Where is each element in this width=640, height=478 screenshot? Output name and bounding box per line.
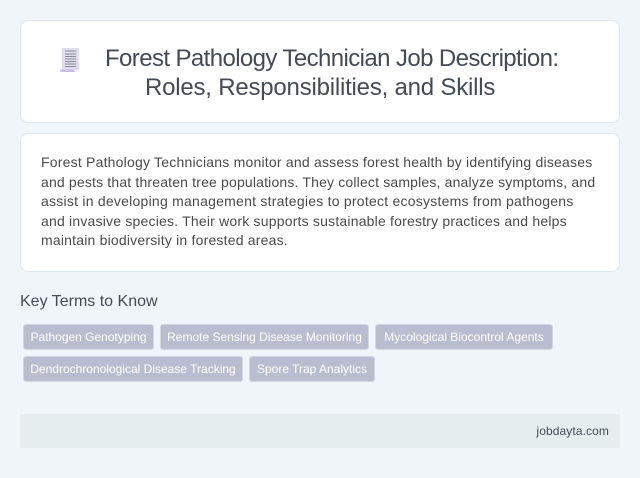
- description text: [41, 154, 595, 248]
- tag: [23, 324, 154, 350]
- description text: and pests that threaten tree populations. They collect samples, analyze symptoms, and: [41, 174, 595, 190]
- tag list: [23, 324, 553, 382]
- tag: [160, 324, 369, 350]
- tag: Mycological Biocontrol Agents: [384, 330, 544, 344]
- description text: maintain biodiversity in forested areas.: [41, 232, 288, 248]
- title line 1: Forest Pathology Technician Job Description:: [105, 45, 558, 72]
- description text: and invasive species. Their work supports sustainable forestry practices and helps: [41, 213, 567, 229]
- title line 2: Roles, Responsibilities, and Skills: [145, 74, 495, 101]
- tag: Pathogen Genotyping: [30, 330, 147, 344]
- description text: assist in developing management strategies to protect ecosystems from pathogens: [41, 193, 574, 209]
- tag: Dendrochronological Disease Tracking: [30, 362, 236, 376]
- tag: Spore Trap Analytics: [257, 362, 367, 376]
- footer source: jobdayta.com: [536, 424, 609, 438]
- description panel: [20, 133, 620, 272]
- footer bar: [20, 414, 620, 448]
- heading: key terms: Key Terms to Know: [20, 293, 158, 310]
- description text: Forest Pathology Technicians monitor and assess forest health by identifying diseases: [41, 154, 592, 170]
- header panel: [20, 20, 620, 123]
- icon: document scroll: [60, 48, 79, 72]
- tag: [23, 356, 243, 382]
- tag: Remote Sensing Disease Monitoring: [167, 330, 362, 344]
- tag: [249, 356, 375, 382]
- tag: [375, 324, 553, 350]
